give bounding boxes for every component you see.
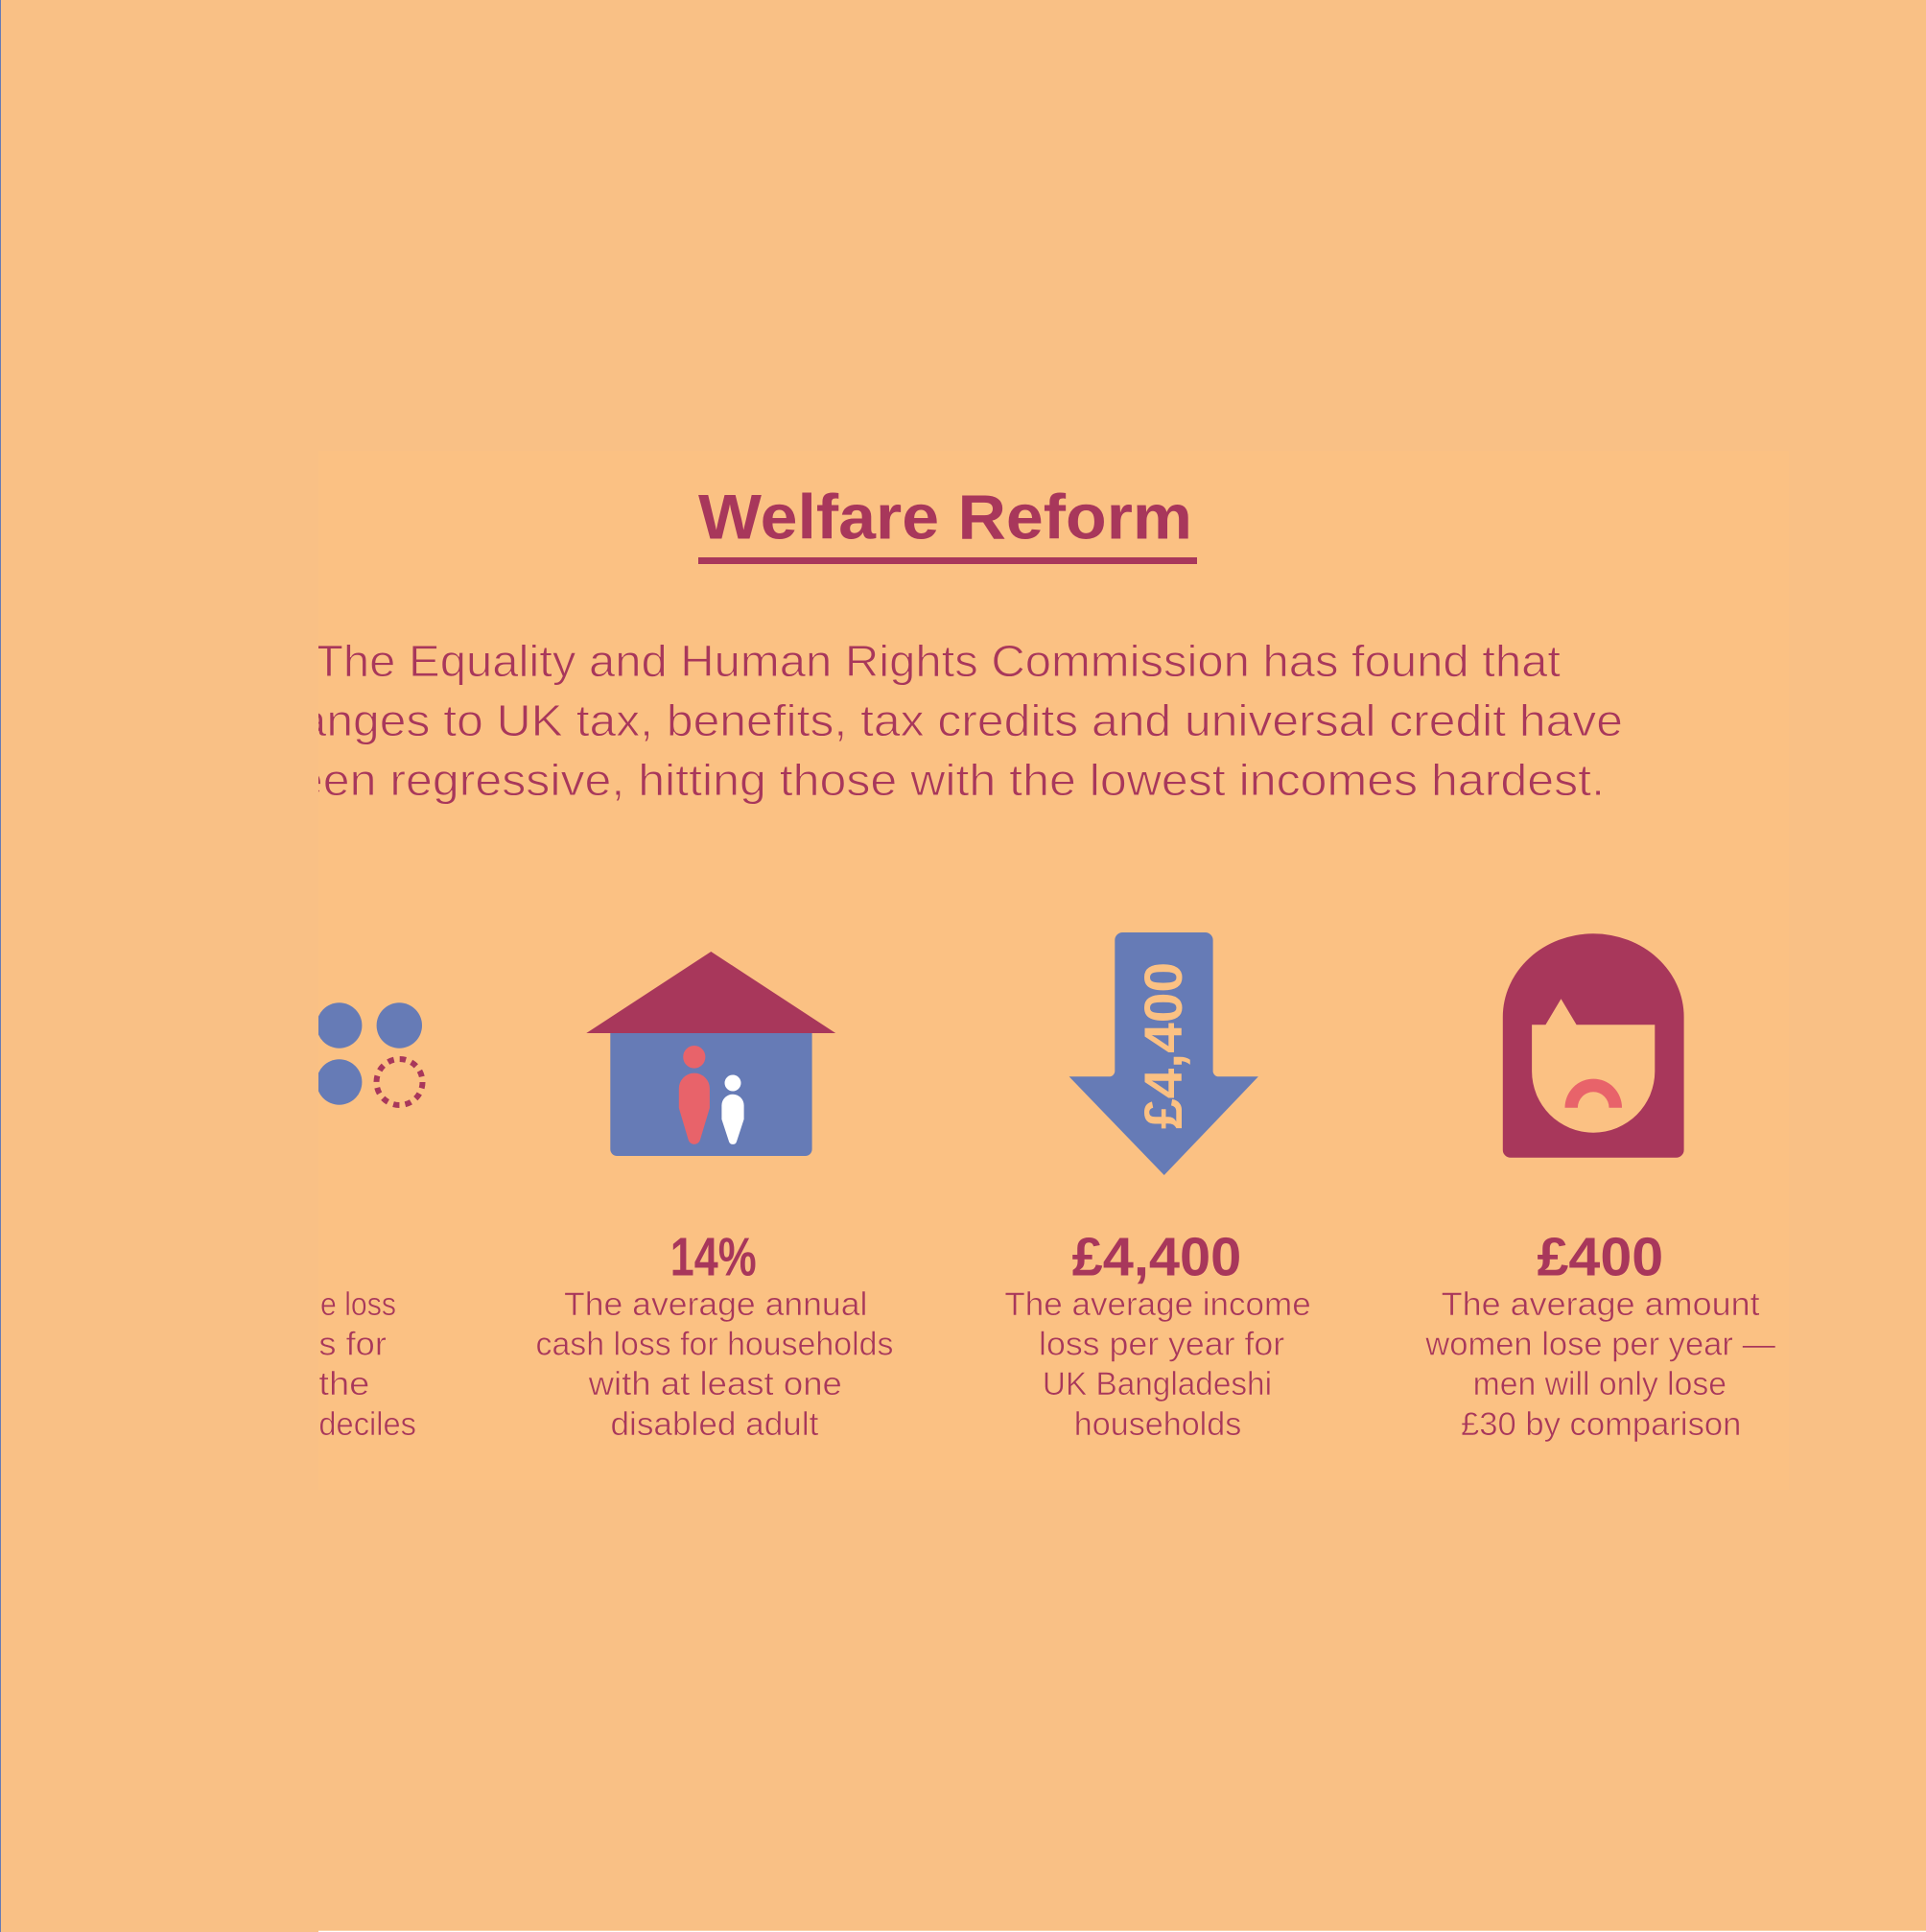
stat: £4,400: UK Bangladeshi [1043, 1366, 1272, 1402]
stat: £400: £30 by comparison [1461, 1406, 1741, 1443]
stat: £4,400: loss per year for [1039, 1327, 1284, 1363]
stat: £4,400 [1004, 1226, 1311, 1443]
stat text: clipped first column: the [318, 1366, 369, 1402]
stat: £400: men will only lose [1473, 1366, 1726, 1402]
stat: 14%: cash loss for households [535, 1327, 893, 1363]
icon: four dots, one dashed [317, 1002, 422, 1105]
icon: house with two figures [586, 952, 835, 1156]
stat: £4,400: households [1074, 1406, 1241, 1443]
stat: 14% [535, 1226, 893, 1443]
stat text: clipped first column [318, 1286, 416, 1443]
intro paragraph: The Equality and Human Rights Commission has found that [315, 636, 1561, 686]
intro paragraph [318, 645, 1621, 804]
stat: £400: £400 [1537, 1226, 1663, 1287]
stat: £400 [1424, 1226, 1775, 1443]
stat: 14%: 14% [670, 1226, 757, 1287]
stat: 14%: with at least one [588, 1366, 842, 1402]
stat: £400: The average amount [1442, 1286, 1760, 1323]
stat: 14%: disabled adult [610, 1406, 819, 1443]
icon: sad woman's face [1503, 933, 1684, 1158]
stat: 14%: The average annual [564, 1286, 867, 1323]
stat: £4,400: £4,400 [1072, 1226, 1241, 1287]
title: Welfare Reform: Welfare Reform [698, 482, 1192, 553]
stat: £4,400: The average income [1004, 1286, 1311, 1323]
stat text: clipped first column: s for [318, 1327, 387, 1363]
icon: down arrow with £4,400 [1069, 932, 1258, 1175]
stat: £400: women lose per year — [1424, 1327, 1775, 1363]
stat text: clipped first column: e loss [320, 1286, 396, 1323]
stat text: clipped first column: deciles [318, 1406, 416, 1443]
intro paragraph: been regressive, hitting those with the lowest incomes hardest. [270, 755, 1605, 805]
intro paragraph: changes to UK tax, benefits, tax credits and universal credit have [249, 695, 1623, 745]
icon: down arrow with £4,400: £4,400 [1133, 962, 1193, 1129]
